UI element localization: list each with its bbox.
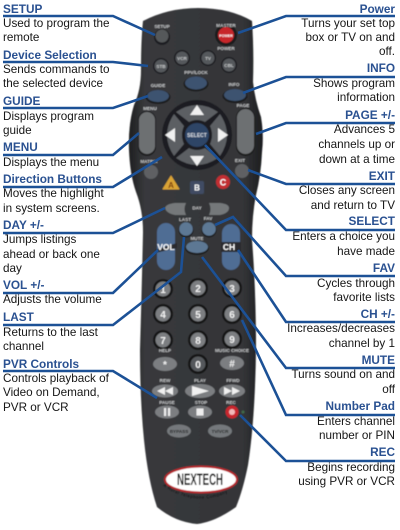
exit button [235,158,249,178]
left callout: VOL [3,250,158,306]
right callout: PAGE: PAGE +/- [345,108,395,122]
left callout: Direction Buttons: Moves the highlight [3,187,104,200]
device selection buttons [153,50,237,74]
number pad: 2 [195,284,201,295]
left callout: DAY: Jumps listings [3,233,77,246]
menu rocker: MENU [143,106,157,111]
menu rocker [138,106,157,156]
right callout: FAV: favorite lists [333,291,395,304]
right callout: FAV [215,217,395,304]
NexTech logo: NEXTECH [177,470,223,489]
page rocker [236,103,255,156]
fav button: FAV [204,216,213,221]
left callout: Device Selection: Device Selection [3,48,97,62]
matrix button [140,159,159,179]
left callout: MENU: MENU [3,140,38,154]
guide button: GUIDE [151,83,165,88]
left callout: SETUP: SETUP [3,2,42,16]
bypass and TV/VCR buttons [167,424,232,438]
record button [226,406,244,418]
number pad: HELP [159,348,171,353]
left callout: PVR Controls: Video on Demand, [3,386,100,399]
number pad: 4 [160,310,166,321]
right callout: Number Pad: Enters channel [317,415,395,428]
left callout: DAY: DAY +/- [3,218,44,232]
left callout: MENU: Displays the menu [3,156,99,169]
number pad: 6 [229,310,235,321]
last button [178,217,194,238]
right callout: Power: off. [379,45,395,58]
NexTech logo: A Rural Telephone Company [164,484,227,499]
right callout: MUTE: off [382,383,396,396]
volume rocker [155,223,177,270]
number pad [153,278,249,374]
day buttons [165,203,229,215]
PVR controls: FFWD [226,378,240,383]
number pad: 5 [195,310,201,321]
right callout: MUTE: MUTE [362,353,395,367]
right callout: PAGE: down at a time [319,153,395,166]
right callout: CH: CH +/- [361,307,395,321]
right callout: Power: Turns your set top [301,17,395,30]
setup button [154,24,170,45]
right callout: MUTE [202,257,396,396]
left callout: Direction Buttons: Direction Buttons [3,172,102,186]
right callout: FAV: Cycles through [317,277,395,290]
right callout: PAGE: Advances 5 [334,123,395,136]
bypass and TV/VCR buttons: BYPASS [170,429,188,434]
right callout: CH: channel by 1 [329,337,395,350]
number pad: MUSIC CHOICE [215,348,249,353]
left callout: Device Selection [3,48,148,90]
right callout: SELECT: SELECT [348,214,396,228]
right callout: INFO: INFO [367,61,395,75]
channel rocker: CH [223,242,235,252]
right callout: Number Pad: number or PIN [319,429,395,442]
left callout: LAST: LAST [3,310,35,324]
right callout: EXIT: and return to TV [311,199,395,212]
right callout: Power: box or TV on and [306,31,395,44]
right callout: SELECT: have made [337,245,395,258]
device selection buttons: TV [205,56,212,61]
left callout: LAST: Returns to the last [3,326,99,339]
left callout: GUIDE [3,94,148,137]
A button [163,176,179,190]
number pad: 7 [160,336,166,347]
direction pad [162,100,232,170]
right callout: CH [238,250,395,350]
number pad: 0 [195,360,201,371]
left callout: PVR Controls: PVR Controls [3,357,79,371]
device selection buttons: CBL [224,63,234,68]
number pad: * [163,360,167,371]
number pad: 8 [195,336,201,347]
power button: MASTER [216,23,236,28]
right callout: PAGE: channels up or [318,138,395,151]
mute button [185,236,209,255]
info button: INFO [229,82,240,87]
left callout: GUIDE: GUIDE [3,94,40,108]
remote control [128,7,264,525]
left callout: DAY: day [3,262,22,275]
left callout: VOL: VOL +/- [3,278,44,292]
right callout: CH: Increases/decreases [287,322,395,335]
left callout: Direction Buttons: in system screens. [3,202,100,215]
B button [190,181,204,194]
PVR controls: REW [160,378,171,383]
left callout: GUIDE: Displays program [3,110,94,123]
page rocker: PAGE [237,103,249,108]
PPV/LOCK button: PPV/LOCK [184,70,208,75]
left callout: PVR Controls [3,357,157,414]
left callout: MENU [3,133,139,169]
PVR controls: PAUSE [159,400,175,405]
left callout: SETUP: remote [3,31,39,44]
last button: LAST [179,217,191,222]
power button: POWER [219,34,233,38]
left callout: LAST [3,237,184,353]
left callout: SETUP [3,2,155,44]
left callout: DAY: ahead or back one [3,248,100,261]
guide button [146,83,170,104]
right callout: Power [238,2,395,58]
right callout: REC: REC [370,445,395,459]
matrix button: MATRIX [140,159,159,164]
PVR controls [152,378,245,418]
number pad: 3 [229,284,235,295]
left callout: Direction Buttons [3,157,162,215]
number pad: # [229,359,235,370]
remote body [129,8,263,524]
power button: POWER [217,46,235,51]
channel rocker [221,224,241,270]
select button: SELECT [187,133,207,139]
left callout: GUIDE: guide [3,124,32,137]
right callout: INFO: information [337,91,395,104]
left callout: Device Selection: Sends commands to [3,63,110,76]
right callout: INFO [243,61,395,104]
right callout: EXIT [248,169,396,212]
left callout: LAST: channel [3,340,44,353]
number pad: 9 [229,335,235,346]
NexTech logo [163,464,239,499]
A button: A [168,181,174,190]
PPV/LOCK button [184,70,208,92]
left callout: PVR Controls: Controls playback of [3,372,110,385]
right callout: SELECT: Enters a choice you [292,230,395,243]
day buttons: DAY [192,206,202,210]
power button [215,23,237,51]
device selection buttons: STB [156,64,166,69]
left callout: DAY [3,208,165,275]
device selection buttons: VCR [177,56,188,61]
right callout: INFO: Shows program [313,77,395,90]
setup button: SETUP [154,24,170,29]
left callout: SETUP: Used to program the [3,17,110,30]
number pad: 1 [160,285,166,296]
info button [222,82,248,103]
right callout: MUTE: Turns sound on and [291,368,395,381]
right callout: REC: Begins recording [307,461,395,474]
C button [216,175,230,189]
right callout: EXIT: Closes any screen [299,184,395,197]
PVR controls: REC [226,400,237,405]
right callout: EXIT: EXIT [369,169,396,183]
right callout: REC: using PVR or VCR [298,475,395,488]
left callout: Device Selection: the selected device [3,77,103,90]
right callout: REC [240,415,395,488]
right callout: Number Pad [242,320,395,442]
PVR controls: PLAY [194,378,206,383]
right callout: Number Pad: Number Pad [326,399,395,413]
fav button [202,216,216,238]
right callout: SELECT [205,145,396,258]
B button: B [194,184,200,192]
right callout: PAGE [256,108,395,166]
volume rocker: VOL [157,242,175,252]
bypass and TV/VCR buttons: TV/VCR [212,429,229,434]
left callout: PVR Controls: PVR or VCR [3,401,69,414]
left callout: VOL: Adjusts the volume [3,293,102,306]
PVR controls: STOP [195,400,207,405]
right callout: Power: Power [360,2,395,16]
mute button: MUTE [190,236,204,241]
C button: C [220,178,227,188]
exit button: EXIT [235,158,245,163]
right callout: FAV: FAV [373,261,395,275]
